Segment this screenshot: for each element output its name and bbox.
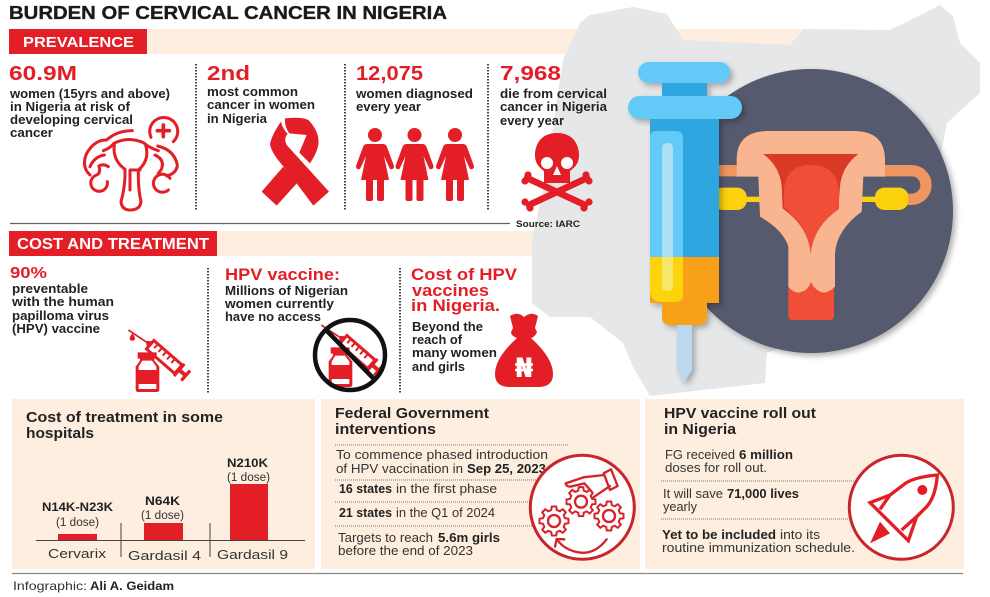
icon: awareness ribbon <box>262 118 329 206</box>
stat: 90%: 90% <box>10 265 47 282</box>
stat: 12,075: 12,075 <box>356 63 423 85</box>
stat: 60.9M: cancer <box>10 125 53 140</box>
stat: cost of HPV vaccines: Beyond the <box>412 319 483 334</box>
panel: HPV vaccine roll out: doses for roll out. <box>665 461 767 475</box>
bar chart: N64K <box>145 496 181 508</box>
separator line <box>10 222 510 224</box>
stat: 2nd: in Nigeria <box>207 111 268 126</box>
stat: 12,075: every year <box>356 99 421 114</box>
prevalence band: PREVALENCE <box>23 34 134 51</box>
stat: 2nd: cancer in women <box>207 97 315 112</box>
stat: 60.9M: women (15yrs and above) <box>9 86 170 101</box>
stat: HPV vaccine: HPV vaccine: <box>225 265 340 284</box>
cost and treatment band: COST AND TREATMENT <box>17 236 210 253</box>
stat: cost of HPV vaccines: many women <box>412 345 497 360</box>
icon: money bag: ₦ <box>515 353 534 384</box>
map of Nigeria <box>532 5 980 396</box>
stat: 60.9M: in Nigeria at risk of <box>10 99 131 114</box>
stat: HPV vaccine <box>224 265 348 324</box>
panel: HPV vaccine roll out: in Nigeria <box>664 422 737 438</box>
stat: 7,968 <box>500 63 608 128</box>
bar chart: N14K-N23K <box>42 502 114 514</box>
panel: HPV vaccine roll out: into its <box>780 528 820 542</box>
panel: federal government interventions: of HPV vaccination in <box>336 462 463 476</box>
icon: no vaccine <box>315 320 385 390</box>
stat: 7,968: every year <box>500 113 564 128</box>
stat: 7,968: cancer in Nigeria <box>500 99 608 114</box>
panel: HPV vaccine roll out: 6 million <box>739 448 793 462</box>
stat: HPV vaccine: women currently <box>224 296 335 311</box>
stat: cost of HPV vaccines: in Nigeria. <box>411 296 500 315</box>
stat: 7,968: die from cervical <box>500 86 607 101</box>
footer line <box>12 572 963 574</box>
panel: HPV vaccine roll out: HPV vaccine roll out <box>664 406 816 422</box>
panel: cost of treatment <box>12 399 315 569</box>
bar chart: N210K <box>227 458 269 470</box>
icon: uterus outline with plus <box>84 117 178 210</box>
bar chart: Cervarix <box>48 546 107 561</box>
panel: federal government interventions: 21 states <box>339 506 392 520</box>
stat: cost of HPV vaccines <box>411 265 518 374</box>
stat: 90%: preventable <box>12 281 88 296</box>
stat: cost of HPV vaccines: vaccines <box>412 281 489 300</box>
panel: federal government interventions: Federal Government <box>335 406 489 422</box>
panel: federal government interventions: Sep 25, 2023 <box>467 462 546 476</box>
panel: federal government interventions: Targets to reach <box>338 531 433 545</box>
stat: 2nd <box>207 63 315 126</box>
divider <box>195 64 197 211</box>
icon: rocket <box>849 455 953 559</box>
circle behind uterus <box>669 69 953 353</box>
stat: 90%: papilloma virus <box>12 308 109 323</box>
stat: 90%: with the human <box>11 294 114 309</box>
credit: Ali A. Geidam <box>90 579 174 593</box>
panel: federal government interventions: interventions <box>335 422 436 438</box>
panel: federal government interventions: 5.6m girls <box>438 531 500 545</box>
icon: three women <box>356 128 474 201</box>
stat: 7,968: 7,968 <box>500 63 561 85</box>
syringe illustration <box>628 62 742 383</box>
bar chart: (1 dose) <box>141 510 184 522</box>
panel: federal government interventions: in the Q1 of 2024 <box>396 506 495 520</box>
icon: vial and syringe <box>128 330 192 392</box>
stat: HPV vaccine: Millions of Nigerian <box>225 283 348 298</box>
stat: cost of HPV vaccines: reach of <box>412 332 463 347</box>
panel: cost of treatment: hospitals <box>26 426 94 442</box>
icon: money bag <box>495 314 553 387</box>
icon: hand and gears <box>530 455 634 559</box>
uterus illustration <box>713 131 926 320</box>
bar chart: Gardasil 4 <box>128 548 201 563</box>
panel: federal government interventions <box>12 399 964 593</box>
stat: 12,075: women diagnosed <box>355 86 473 101</box>
panel: HPV vaccine roll out: routine immunization schedule. <box>662 541 855 555</box>
stat: 2nd: 2nd <box>207 63 250 85</box>
panel: cost of treatment: Cost of treatment in some <box>26 410 223 426</box>
prevalence band <box>9 29 801 54</box>
panel: federal government interventions: To commence phased introduction <box>336 448 548 462</box>
credit: Infographic: <box>13 579 87 593</box>
stat: 60.9M <box>9 63 170 140</box>
panel: federal government interventions: before the end of 2023 <box>338 544 473 558</box>
panel: HPV vaccine roll out: FG received <box>665 448 735 462</box>
stat: 60.9M: 60.9M <box>9 63 77 85</box>
stat: HPV vaccine: have no access <box>225 309 321 324</box>
title: BURDEN OF CERVICAL CANCER IN NIGERIA <box>9 3 447 23</box>
divider <box>399 268 401 393</box>
panel: HPV vaccine roll out: yearly <box>663 500 698 514</box>
stat: 90% <box>10 265 114 336</box>
stat: 90%: (HPV) vaccine <box>12 321 100 336</box>
panel: federal government interventions: in the first phase <box>396 482 497 496</box>
divider <box>207 268 209 393</box>
bar chart: Gardasil 9 <box>217 547 288 562</box>
panel: HPV vaccine roll out: Yet to be included <box>662 528 776 542</box>
panel: HPV vaccine roll out: It will save <box>663 487 723 501</box>
divider <box>487 64 489 211</box>
panel: federal government interventions: 16 states <box>339 482 392 496</box>
stat: cost of HPV vaccines: and girls <box>412 359 465 374</box>
stat: cost of HPV vaccines: Cost of HPV <box>411 265 518 284</box>
icon: skull and crossbones <box>521 133 593 212</box>
bar chart <box>36 458 305 563</box>
divider <box>344 64 346 211</box>
panel: HPV vaccine roll out: 71,000 lives <box>727 487 799 501</box>
cost and treatment band <box>9 231 534 256</box>
source note: Source: IARC <box>516 219 580 230</box>
bar chart: (1 dose) <box>56 517 99 529</box>
stat: 2nd: most common <box>207 84 298 99</box>
bar chart: (1 dose) <box>227 472 270 484</box>
stat: 60.9M: developing cervical <box>10 112 133 127</box>
stat: 12,075 <box>355 63 473 114</box>
panel: HPV vaccine roll out <box>645 399 964 569</box>
